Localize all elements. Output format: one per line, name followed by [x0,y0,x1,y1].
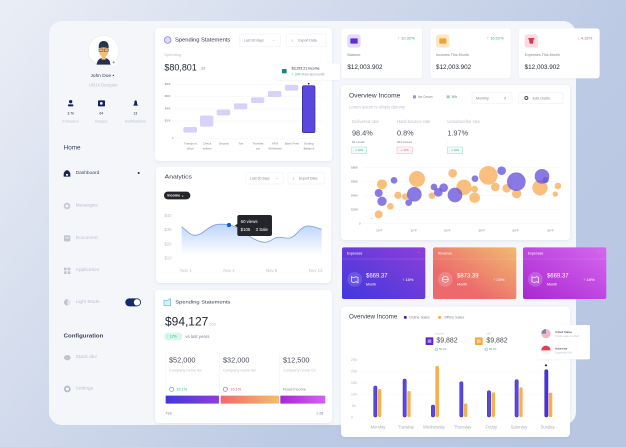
nav: stack dev [64,354,97,360]
tooltip: views: $105 [241,227,251,232]
bar chart: Friday [486,424,498,429]
tooltip: income: + 10% From last month [292,72,325,76]
summary: income [426,332,458,351]
gradient card: revenue: $873.39 [457,274,479,280]
panel: overview income bars [341,307,570,437]
gradient card: expenses purple: ··· [598,250,601,254]
waterfall chart: ATM [272,142,279,146]
bubble chart: 32°F [410,228,417,232]
nav: light mode: Light Mode [76,299,100,305]
metric: delivered [352,119,380,154]
stat card: expenses [519,28,600,78]
bar chart: 5k [352,404,356,408]
bar chart: 15k [351,381,357,385]
summary: sell [475,332,508,351]
area chart: $10 [164,255,172,260]
bar chart: Thursday [454,424,472,429]
bar chart [351,358,560,429]
gradient card: expenses: ↑ 18% [402,277,414,282]
gradient card: expenses purple: ↑ 18% [583,277,595,282]
waterfall chart: Balance [304,147,315,151]
metric: hard bounce: 0.8% [397,128,414,137]
bubble chart: 0 [359,222,361,226]
stat card: balance: $12,003.902 [347,64,383,71]
metric: hard bounce: 844 clicked [397,140,412,144]
nav: dashboard [64,170,140,177]
waterfall chart: $40K [165,107,171,110]
area chart: $20 [164,241,172,246]
stat: notifications: 13 [133,111,137,115]
monthly select: ⇕ [504,96,507,100]
nav: document: Document [76,235,98,241]
gradient card: expenses: ··· [417,250,420,254]
total amount: $94,127 [165,315,209,329]
bar chart: 20k [351,370,357,374]
country popover: Indonesia [555,346,568,350]
card header: ⤓ [291,38,293,42]
spending amount [164,52,206,72]
metric: unsubscribe: Unsubscribe rate [447,119,481,124]
gradient card: revenue: Month [457,282,467,286]
panel: sidebar lower [64,235,141,391]
tooltip: income [276,63,340,80]
tooltip: views [235,215,272,236]
export button [288,173,324,184]
bar chart: 10k [351,393,357,397]
gradient card: expenses purple: Month [547,282,557,286]
waterfall chart: Check [203,142,212,146]
bars legend: Offline Sales [444,315,464,319]
waterfall chart: 0 [172,137,174,140]
nav: settings: Settings [76,385,94,391]
stat card: expenses: Expenses This Month [525,53,560,57]
summary: income: 50.1% [439,347,447,351]
bars title: Overview Income [349,314,398,320]
metric: hard bounce: Hard bounce rate [397,119,431,124]
metric: unsubscribe: - [447,140,448,144]
heading: configuration: Configuration [64,334,104,340]
waterfall chart: out [256,147,260,151]
panel: spending statements waterfall [155,28,332,161]
company b: 16.1% [230,387,242,391]
heading: home: Home [64,144,81,151]
bars legend: Online Sales [409,315,430,319]
card header: ~ [273,38,275,42]
trend pill: vs last years [185,334,209,339]
area chart: Nov 12 [309,268,323,273]
bar chart: 25k [351,358,357,362]
stat: images [95,100,108,124]
nav: stack dev: Stack dev [76,354,97,360]
area chart: Nov 4 [223,268,235,273]
nav: application: Application [76,267,100,273]
waterfall chart: office [187,147,194,151]
metric: hard bounce: ↙ 27% [401,148,409,152]
panel: sidebar [62,35,146,209]
legend [413,95,458,99]
area chart: $40 [164,213,172,218]
bar chart: Saturday [511,424,528,429]
summary: sell: 50.1% [489,347,497,351]
metric: delivered: ↗ 19% [355,148,364,152]
bubble chart: 23°F [376,228,383,232]
nav: messages [64,202,98,209]
income pill [164,192,190,199]
metric: unsubscribe: 1.97% [447,128,469,137]
stat: followers [62,100,79,124]
bubble chart: $80K [351,165,358,169]
card header [164,34,326,47]
nav: application [64,267,100,274]
area chart: $35 [164,227,172,232]
footer range: 1-28 [316,411,323,415]
export button: ⤓ [293,177,295,181]
edit charts button: Edit charts [533,96,550,100]
bubble chart: 58°F [478,228,485,232]
footer range [166,411,323,415]
waterfall chart: Withdrawl [268,147,282,151]
export button: Export Data [299,177,317,181]
waterfall chart [165,83,323,151]
income pill: Income ⌄ [167,193,184,197]
stat card: incomes: $12,003.902 [436,64,472,71]
waterfall chart: Ending [304,142,314,146]
waterfall chart: $20K [165,119,171,122]
main dashboard panel [49,21,576,425]
company a: $52,000 [169,355,195,364]
company c [280,355,325,404]
summary: income: Income [435,332,444,336]
bar chart: Sunday [541,424,556,429]
metric: delivered: 84 emails [352,140,365,144]
waterfall chart: Transport [184,142,197,146]
profile role: UI/UX Designer [89,82,118,87]
bubble chart: $20K [351,208,358,212]
footer range: Feb [166,411,172,415]
tooltip: views: 3 Sale [256,227,269,232]
company a: Company name Aa [169,368,202,372]
panel: analytics [156,167,331,283]
area chart [164,213,323,273]
bar chart: 0 [351,416,353,420]
stat card: expenses: ↓ 4.32% [578,35,593,40]
nav: dashboard: Dashboard [76,170,100,176]
stat cards row [341,28,600,78]
company c: Company name Cc [283,368,316,372]
trend pill [164,333,209,340]
country popover: Online sales in 2020 [555,334,580,338]
monthly select [472,93,512,104]
date filter: ~ [276,177,278,181]
stat: images: Images [95,120,108,124]
card header: Spending Statements [175,37,231,43]
bar chart: Monday [371,424,386,429]
bubble chart: 80°F [512,228,519,232]
bars legend [404,315,464,319]
country popover: Expansion 0% [555,350,573,354]
gradient card: expenses: $669.37 [366,274,388,280]
nav: document [64,235,98,241]
edit charts button [519,93,563,104]
panel: overview income bubbles [341,85,570,240]
legend: Ice Cream [418,95,433,99]
subtitle: Lorem Ipsum is simply dummy [349,104,406,109]
stat: notifications: Notifications [125,120,146,124]
stat card: balance: ↑ 10.32% [398,35,415,40]
gradient card: revenue: ··· [508,250,511,254]
metric: delivered: Delivered rate [352,119,380,124]
area chart: Nov 8 [266,268,278,273]
card title: Spending Statements [175,300,231,306]
legend: Milk [452,95,458,99]
gradient card: revenue: Revenue [438,251,452,255]
trend pill: ↑ 12% [167,335,177,339]
company c: Fixed Income [283,387,306,391]
area chart: Nov 1 [180,268,192,273]
stat: notifications [125,100,146,124]
summary: income: $9,882 [436,337,458,344]
toggle [125,298,141,306]
spending amount: .32 [200,65,206,70]
company a: 32.1% [176,387,188,391]
gradient card: expenses: Expenses [347,251,363,255]
gradient card: revenue [433,247,516,299]
waterfall chart: Transfer [252,142,263,146]
stat card: incomes [431,28,511,78]
bubble chart: $40K [351,194,358,198]
profile name: John Doe • [90,73,114,79]
waterfall chart: written [203,147,212,151]
company b: $32,000 [223,355,249,364]
country popover [537,325,590,359]
spending amount: $80,801 [164,62,197,72]
card title [164,299,231,306]
bubble chart: $60K [351,179,358,183]
nav: settings [65,385,94,391]
card header: Last 30 days [244,38,264,42]
stat card: expenses: $12,003.902 [525,64,560,71]
waterfall chart: Deposit [219,142,229,146]
stat: images: 64 [99,111,103,115]
stat: followers: 3.7k [67,111,74,115]
waterfall chart: Bank Fees [285,142,300,146]
stat card: incomes: Incomes This Month [436,53,469,57]
card header: Export Data [298,38,317,42]
metric: delivered: 98.4% [352,128,373,137]
tooltip: views: 60 views [241,219,258,224]
date filter [246,173,283,184]
gradient card: expenses purple: $669.37 [547,274,569,280]
gradient cards row [342,247,606,299]
tooltip: income: $3,293.21 Income [292,66,320,70]
company b [221,355,279,404]
panel: spending statements companies [155,290,332,423]
nav: light mode [64,299,100,306]
monthly select: Monthly [476,96,489,100]
avatar [88,35,119,66]
metric: hard bounce [397,119,431,154]
gradient card: expenses [342,247,425,299]
gradient card: revenue: ↑ 24% [493,277,505,282]
waterfall chart: $60K [165,95,171,98]
nav: messages: Messages [76,202,98,208]
stat card: balance: Balance [347,53,361,57]
overview title: Overview Income [349,93,401,99]
summary: sell: sell [486,332,491,336]
stat: followers: Followers [62,120,79,124]
bar chart: Wednesday [423,424,446,429]
metric: unsubscribe: ↗ 19% [451,148,460,152]
analytics title: Analytics [165,175,192,181]
waterfall chart: $80K [165,83,171,86]
total amount: .500 [208,321,217,326]
bubble chart [351,165,561,232]
bubble chart: 50°F [444,228,451,232]
bar chart: Tuesday [398,424,415,429]
date filter: Last 30 days [250,177,270,181]
stat card: incomes: ↑ 16.02% [487,35,504,40]
spending amount: Spending [164,52,181,57]
stat card: balance [341,28,422,78]
company b: Company name Bb [223,368,256,372]
company a [166,355,219,404]
waterfall chart: Tax [239,142,244,146]
gradient card: expenses purple [523,247,606,299]
country popover: United States [555,330,573,334]
gradient card: expenses: Month [366,282,376,286]
company c: $12,500 [283,355,309,364]
bubble chart: 80°F [547,228,554,232]
metric: unsubscribe [447,119,481,154]
gradient card: expenses purple: Expenses [528,251,544,255]
summary: sell: $9,882 [486,337,508,344]
